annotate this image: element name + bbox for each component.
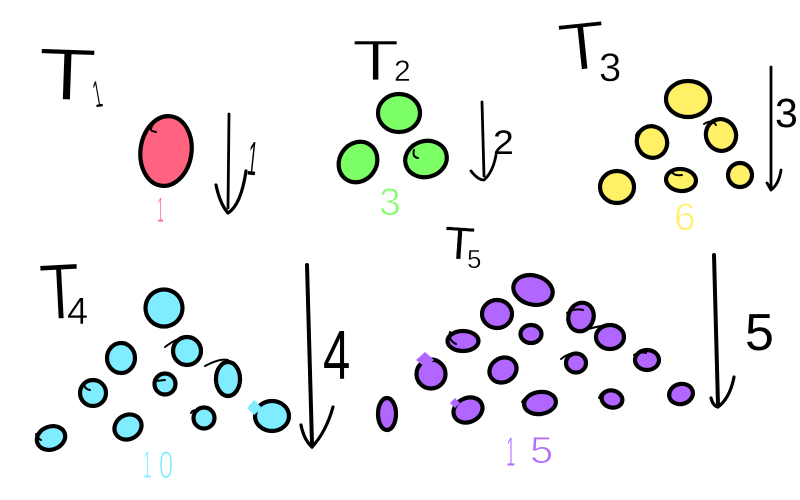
label: count 10 xyxy=(143,442,173,487)
label: count 1: 1 xyxy=(157,190,164,230)
panel: T2 xyxy=(331,29,514,224)
heading: T4: 4 xyxy=(67,291,88,333)
panel: T5 xyxy=(378,218,774,475)
arrow: row height 4 xyxy=(301,265,333,447)
dots: ten blue dots xyxy=(33,290,289,454)
label: count 15: 1 xyxy=(506,428,515,475)
dot: single pink dot xyxy=(136,113,196,189)
heading: T2: T xyxy=(352,29,399,93)
label: count 6: 6 xyxy=(674,196,696,239)
label: count 15: 5 xyxy=(530,430,553,472)
dots: fifteen purple dots xyxy=(378,271,695,430)
heading: T5: T xyxy=(442,218,476,271)
panel: T4 xyxy=(33,246,350,487)
label: count 15 xyxy=(506,428,553,475)
heading: T3: T xyxy=(555,6,610,87)
dots: three green dots xyxy=(331,94,451,190)
arrow: row height 5 xyxy=(711,255,734,407)
heading: T5: 5 xyxy=(467,244,481,274)
heading: T1: 1 xyxy=(90,74,105,117)
label: height 3: 3 xyxy=(775,90,798,136)
arrow: row height 1 xyxy=(216,114,246,213)
label: count 10: 1 xyxy=(143,444,152,487)
panel: T1 xyxy=(36,33,260,230)
label: height 1: 1 xyxy=(245,131,260,186)
panel: T3 xyxy=(555,6,798,239)
heading: T4: T xyxy=(37,246,82,337)
label: height 5: 5 xyxy=(745,304,774,362)
arrow: row height 2 xyxy=(471,102,496,180)
label: height 2: 2 xyxy=(493,124,514,162)
dots: six yellow dots xyxy=(600,81,752,203)
label: height 4: 4 xyxy=(323,315,350,394)
arrow: row height 3 xyxy=(767,67,781,190)
heading: T1: T xyxy=(36,33,98,117)
heading: T2: 2 xyxy=(394,55,411,88)
label: count 3: 3 xyxy=(379,181,401,224)
label: count 10: 0 xyxy=(159,442,173,486)
heading: T3: 3 xyxy=(599,46,621,90)
